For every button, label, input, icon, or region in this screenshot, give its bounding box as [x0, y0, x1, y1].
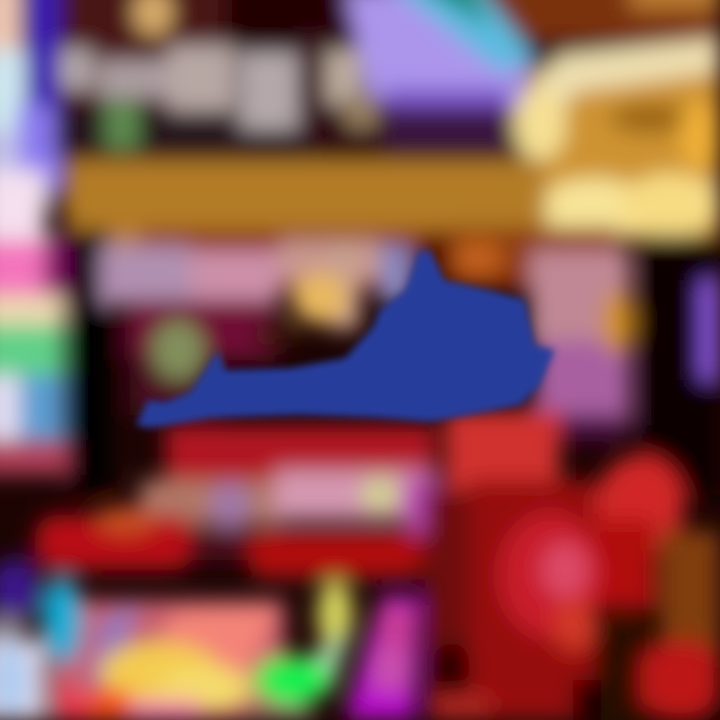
right chandelier	[514, 38, 720, 242]
ceiling: dark maroon and brown	[0, 0, 720, 210]
gold counter band	[66, 160, 546, 230]
right dark pillar	[640, 235, 720, 495]
colourful gaming floor	[0, 576, 420, 720]
map: Kentucky state silhouette	[136, 250, 555, 428]
pink crowd around the map	[100, 240, 634, 440]
title lettering	[55, 30, 377, 155]
left column: colourful slot machine	[0, 0, 70, 475]
left dark pillar	[68, 190, 110, 490]
rainbow sign	[345, 0, 535, 150]
red table rails	[0, 506, 423, 622]
red stools	[425, 455, 720, 720]
red band and pink cards below the map	[140, 410, 560, 537]
orange wall	[110, 228, 620, 301]
